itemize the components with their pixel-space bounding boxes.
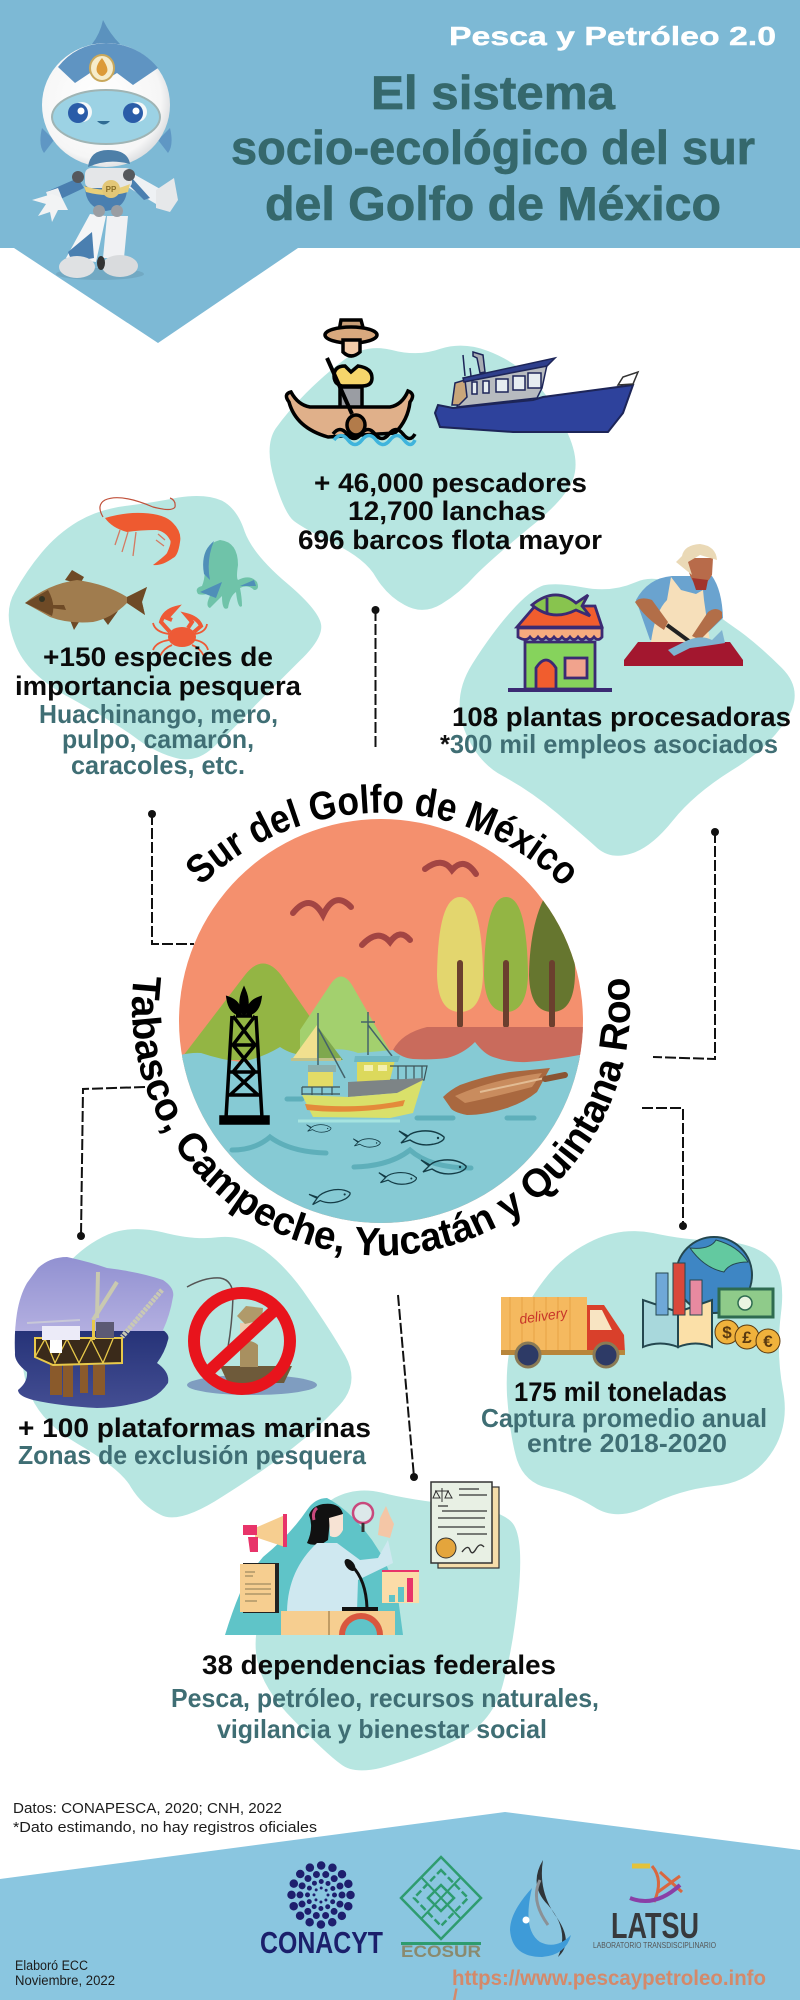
icon: yellow fishing boat — [291, 1012, 427, 1121]
blob — [270, 346, 576, 610]
central scene illustration — [170, 819, 590, 1230]
connector: pescadores — [372, 606, 380, 750]
panel: toneladas — [481, 1231, 785, 1514]
blob — [9, 496, 321, 759]
icon: octopus — [197, 540, 258, 609]
waves — [232, 1099, 534, 1168]
footer band — [0, 1812, 800, 2000]
trees — [437, 885, 575, 1028]
water — [170, 1042, 590, 1230]
text: plantas — [440, 702, 791, 759]
connector: plantas — [653, 828, 719, 1059]
panel: plantas — [440, 544, 795, 856]
icon: delivery truck: delivery — [518, 1304, 569, 1327]
icon: delivery truck — [501, 1297, 625, 1367]
icon: globe, chart and money — [643, 1237, 780, 1353]
title — [231, 66, 755, 230]
text: dependencias: Pesca, petróleo, recursos naturales, — [171, 1683, 599, 1713]
sky — [179, 819, 583, 1223]
icon: fish — [25, 570, 147, 630]
website url — [452, 1967, 766, 2000]
title: socio-ecológico del sur — [231, 121, 755, 174]
blob — [460, 579, 795, 856]
birds — [293, 863, 476, 945]
logo: conacyt — [260, 1866, 383, 1960]
icon: legal document — [431, 1482, 499, 1568]
icon: fish shop — [508, 595, 612, 690]
text: pescadores stats: + 46,000 pescadores — [314, 468, 587, 498]
sources note: Datos: CONAPESCA, 2020; CNH, 2022 — [13, 1800, 282, 1817]
logo: pesca y petroleo drop — [510, 1860, 571, 1957]
sources note: *Dato estimando, no hay registros oficiales — [13, 1819, 317, 1836]
icon: fishing vessel — [435, 352, 638, 432]
connector: especies — [148, 810, 194, 944]
credits — [15, 1958, 115, 1988]
connector: plataformas — [77, 1087, 145, 1240]
curved heading: sur del golfo: Sur del Golfo de México — [186, 784, 574, 884]
left arm — [46, 178, 84, 204]
icon: woman cutting fish — [624, 544, 743, 666]
title: del Golfo de México — [265, 177, 721, 230]
icon: oil derrick — [221, 990, 268, 1123]
text: especies — [15, 642, 302, 780]
text: plataformas: Zonas de exclusión pesquera — [18, 1440, 367, 1470]
credits: Noviembre, 2022 — [15, 1973, 115, 1988]
logo: ecosur — [401, 1857, 481, 1961]
text: plataformas: + 100 plataformas marinas — [18, 1413, 371, 1443]
subtitle: Pesca y Petróleo 2.0 — [449, 21, 776, 51]
text: plantas: 108 plantas procesadoras — [452, 702, 791, 732]
text: plataformas — [18, 1413, 371, 1470]
text: dependencias: 38 dependencias federales — [202, 1650, 556, 1680]
connector: toneladas — [642, 1108, 687, 1230]
icon: shrimp — [100, 498, 180, 565]
blob — [507, 1231, 785, 1514]
blob — [22, 1229, 352, 1517]
icon: globe, chart and money: € — [763, 1332, 773, 1351]
text: especies: pulpo, camarón, — [62, 724, 254, 754]
panel: especies — [9, 496, 321, 780]
torso — [85, 186, 127, 211]
text: especies: importancia pesquera — [15, 671, 302, 701]
icon: offshore platform — [14, 1257, 174, 1408]
logo: ecosur: ECOSUR — [401, 1942, 481, 1961]
text: especies: caracoles, etc. — [71, 750, 245, 780]
icon: no fishing sign — [187, 1278, 317, 1395]
website url: https://www.pescaypetroleo.info — [452, 1967, 766, 1990]
text: pescadores stats: 696 barcos flota mayor — [298, 525, 602, 555]
icon: globe, chart and money: $ — [722, 1323, 732, 1342]
header band — [0, 0, 800, 343]
text: pescadores stats — [298, 468, 602, 555]
right arm — [126, 172, 162, 204]
curved heading: estados: Tabasco, Campeche, Yucatán y Quintana Roo — [132, 977, 630, 1258]
shore — [393, 1027, 590, 1065]
mascot robot — [32, 20, 178, 280]
logo: latsu — [593, 1866, 716, 1950]
text: toneladas — [481, 1377, 767, 1458]
sources note — [13, 1800, 317, 1836]
panel: pescadores — [270, 320, 638, 610]
panel: plataformas — [10, 1229, 371, 1517]
icon: fisher in canoe — [286, 320, 415, 444]
logo: latsu: LABORATORIO TRANSDISCIPLINARIO — [593, 1941, 716, 1950]
title: El sistema — [371, 66, 616, 119]
text: especies: Huachinango, mero, — [39, 699, 278, 729]
text: toneladas: 175 mil toneladas — [514, 1377, 727, 1407]
text: toneladas: Captura promedio anual — [481, 1403, 767, 1433]
icon: official at podium — [225, 1498, 419, 1635]
legs — [66, 214, 106, 262]
panel: dependencias — [171, 1482, 599, 1770]
text: plantas: *300 mil empleos asociados — [440, 729, 778, 759]
text: toneladas: entre 2018-2020 — [527, 1428, 727, 1458]
text: especies: +150 especies de — [43, 642, 273, 672]
logo: conacyt: CONACYT — [260, 1925, 383, 1960]
icon: wooden rowboat — [443, 1068, 565, 1115]
icon: crab — [153, 608, 208, 656]
icon: small fish — [307, 1125, 466, 1207]
text: pescadores stats: 12,700 lanchas — [348, 496, 546, 526]
head — [42, 43, 170, 167]
connector: dependencias — [398, 1295, 418, 1481]
text: dependencias — [171, 1650, 599, 1744]
blob — [256, 1490, 520, 1770]
mascot robot: PP — [106, 185, 117, 194]
icon: globe, chart and money: £ — [742, 1328, 752, 1347]
logo: latsu: LATSU — [611, 1905, 699, 1946]
credits: Elaboró ECC — [15, 1958, 88, 1973]
mountains — [182, 964, 310, 1060]
text: dependencias: vigilancia y bienestar social — [217, 1714, 547, 1744]
